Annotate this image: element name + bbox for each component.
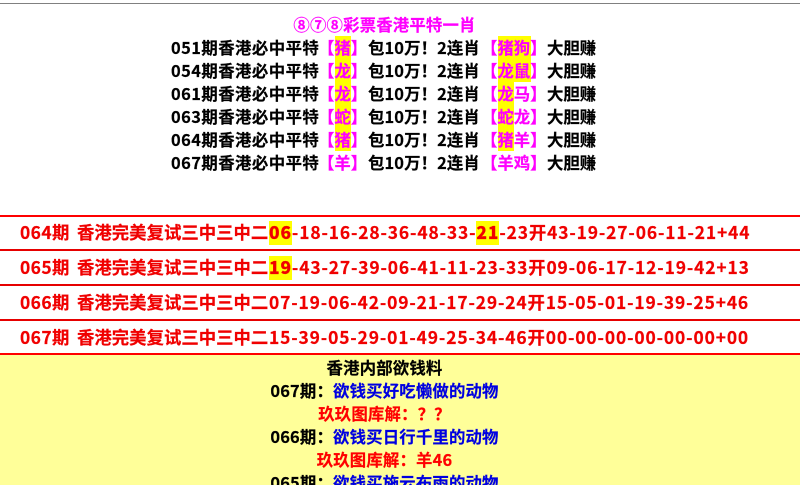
row 051: 【猪狗】 <box>481 35 547 59</box>
row 051: 051期香港必中平特 <box>171 35 319 59</box>
row 063: 大胆赚 <box>547 104 596 128</box>
row 061: 包10万！2连肖 <box>368 81 480 105</box>
row 063: 【蛇龙】 <box>481 104 547 128</box>
row 054: 大胆赚 <box>547 58 596 82</box>
draw row 065: 19 <box>269 255 292 280</box>
row 061: 【龙】 <box>318 81 367 105</box>
row 061 <box>171 81 596 105</box>
row 054 <box>171 58 596 82</box>
row 061: 061期香港必中平特 <box>171 81 319 105</box>
row 064: 【猪】 <box>318 127 367 151</box>
row 067 <box>171 150 596 174</box>
riddle 067: 067期：欲钱买好吃懒做的动物 <box>270 378 499 402</box>
draw row 065: 香港完美复试三中三中二 <box>77 255 268 280</box>
row 054: 包10万！2连肖 <box>368 58 480 82</box>
row 054: 【龙鼠】 <box>481 58 547 82</box>
row 051: 大胆赚 <box>547 35 596 59</box>
draw row 067: 香港完美复试三中三中二 <box>77 325 268 350</box>
heading: riddle section: 香港内部欲钱料 <box>327 355 442 379</box>
draw row 064: 06 <box>269 220 292 245</box>
row 054: 【龙】 <box>318 58 367 82</box>
draw row 065 <box>20 255 750 280</box>
draw row 066: 066期 <box>20 290 70 315</box>
row 064: 大胆赚 <box>547 127 596 151</box>
row 064: 【猪羊】 <box>481 127 547 151</box>
row 067: 【羊鸡】 <box>481 150 547 174</box>
row 067: 包10万！2连肖 <box>368 150 480 174</box>
highlight: double-pick column lower <box>498 82 514 151</box>
row 054: 054期香港必中平特 <box>171 58 319 82</box>
draw row 064: 21 <box>476 220 499 245</box>
row 051: 包10万！2连肖 <box>368 35 480 59</box>
draw row 065: -43-27-39-06-41-11-23-33开09-06-17-12-19-42+13 <box>292 255 750 280</box>
draw row 064 <box>20 220 750 245</box>
draw row 064: 香港完美复试三中三中二 <box>77 220 268 245</box>
row 061: 大胆赚 <box>547 81 596 105</box>
draw row 067: 067期 <box>20 325 70 350</box>
answer 066: 玖玖图库解：羊46 <box>317 447 452 471</box>
panel: one-zodiac picks <box>171 12 596 174</box>
draw row 064: 064期 <box>20 220 70 245</box>
row 063: 063期香港必中平特 <box>171 104 319 128</box>
highlight: double-pick column top <box>498 36 531 82</box>
highlight: single-pick column <box>335 36 351 151</box>
draw row 066: 香港完美复试三中三中二 <box>77 290 268 315</box>
draw row 066 <box>20 290 749 315</box>
row 064: 包10万！2连肖 <box>368 127 480 151</box>
row 067: 067期香港必中平特 <box>171 150 319 174</box>
draw row 067: 15-39-05-29-01-49-25-34-46开00-00-00-00-00-00+00 <box>269 325 749 350</box>
panel: number draws <box>0 215 800 355</box>
panel: inside riddle material <box>0 355 800 485</box>
draw row 064: -18-16-28-36-48-33- -23开43-19-27-06-11-21+44 <box>292 220 750 245</box>
row 061: 【龙马】 <box>481 81 547 105</box>
row 051 <box>171 35 596 59</box>
row 063 <box>171 104 596 128</box>
row 064 <box>171 127 596 151</box>
heading: lottery title: ⑧⑦⑧彩票香港平特一肖 <box>293 12 476 36</box>
row 063: 包10万！2连肖 <box>368 104 480 128</box>
draw row 065: 065期 <box>20 255 70 280</box>
row 064: 064期香港必中平特 <box>171 127 319 151</box>
answer 067: 玖玖图库解：？？ <box>318 401 451 425</box>
row 051: 【猪】 <box>318 35 367 59</box>
top rule <box>0 3 800 4</box>
draw row 066: 07-19-06-42-09-21-17-29-24开15-05-01-19-39-25+46 <box>269 290 749 315</box>
riddle 066: 066期：欲钱买日行千里的动物 <box>270 424 499 448</box>
row 067: 【羊】 <box>318 150 367 174</box>
row 067: 大胆赚 <box>547 150 596 174</box>
row 063: 【蛇】 <box>318 104 367 128</box>
draw row 067 <box>20 325 749 350</box>
